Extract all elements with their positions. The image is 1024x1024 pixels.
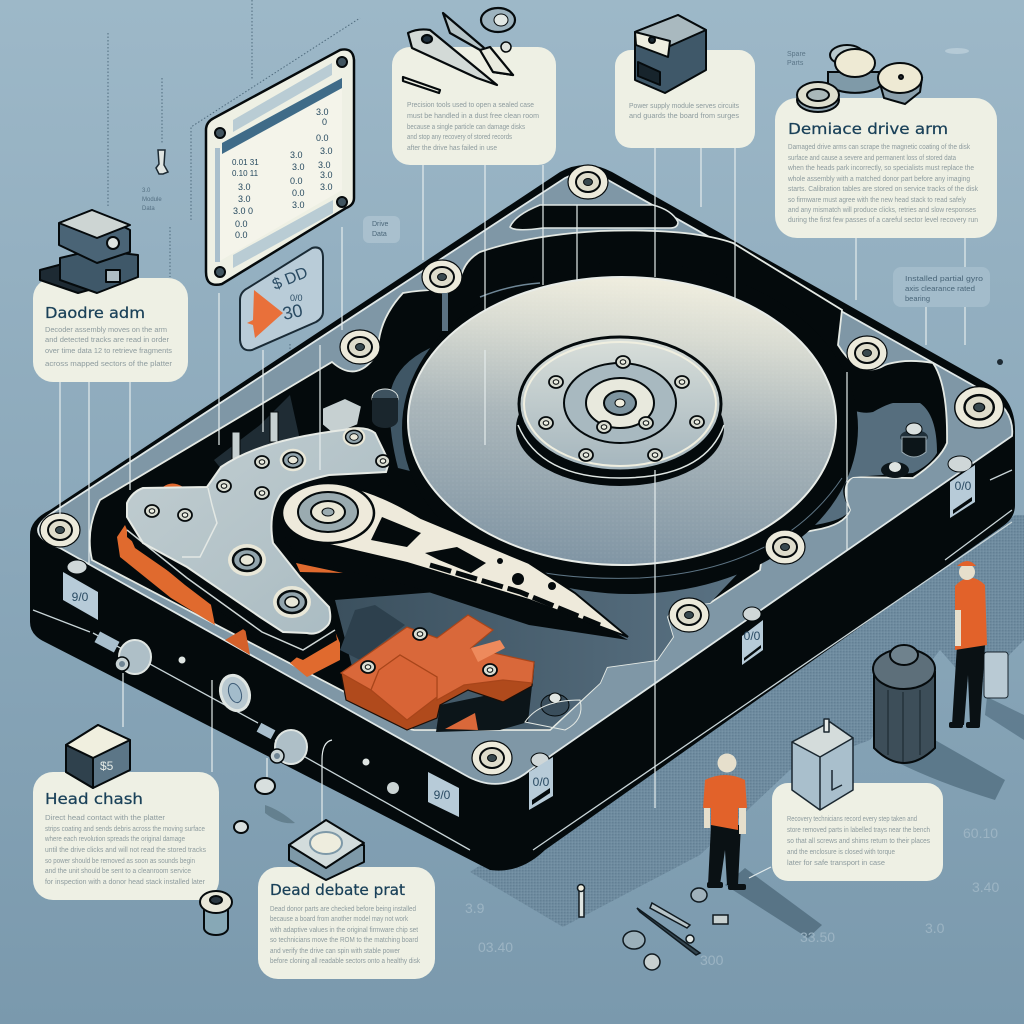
body: head crash: until the drive clicks and will not read the stored tracks [45,847,206,854]
heading: dead part: Dead debate prat [270,881,405,899]
body: top right: so firmware must agree with the new head stack to read safely [788,197,966,204]
icon: bushing [200,891,232,935]
chip: right note: bearing [905,294,930,303]
heading: top right: Demiace drive arm [788,120,948,138]
panel: monitor table: 3.0 [320,170,333,180]
body: dead part: because a board from another model may not work [270,916,408,923]
body: left panel: Decoder assembly moves on the arm [45,327,167,334]
faint numbers: 03.40 [478,939,513,955]
orange controller block [340,605,534,732]
body: head crash: for inspection with a donor head stack installed later [45,879,206,886]
chip: right note: axis clearance rated [905,284,975,293]
actuator posts [163,389,398,487]
panel: monitor table: 3.0 [320,146,333,156]
wall tiles: 0/0 [744,629,761,643]
chip: orange play marker: 0/0 [290,293,303,303]
read-write head arm [282,483,628,640]
body: dead part: and verify the drive can spin with stable power [270,948,401,955]
faint numbers: 33.50 [800,929,835,945]
left platter floor [390,345,437,472]
body: top right: when the heads park incorrectly, so specialists must replace the [787,165,974,172]
body: dead part: Dead donor parts are checked before being installed [270,906,416,913]
panel: monitor table [206,49,354,285]
leader lines [60,148,965,867]
body: dead part: so technicians move the ROM to the matching board [270,937,418,944]
chip: small note: Drive [372,221,388,228]
panel: monitor table: 3.0 0 [233,206,253,216]
panel: left top [33,278,188,382]
chip: right note [893,267,990,307]
faint numbers: 60.10 [963,825,998,841]
body: top middle: and stop any recovery of stored records [407,134,512,141]
background dotted guide lines [108,0,360,362]
body: dead part: before cloning all readable sectors onto a healthy disk [270,958,420,965]
disk platter [408,277,836,565]
body: top box: Power supply module serves circuits [629,103,739,110]
pocket posts [442,283,928,478]
orange coil under arm [117,525,343,677]
panel: lower right [772,783,943,881]
chip: orange play marker: 30 [281,300,304,324]
body: top right: surface and cause a severe and permanent loss of stored data [788,155,956,162]
body: lower right: Recovery technicians record every step taken and [787,816,917,823]
panel: monitor table: 0.0 [235,219,248,229]
panel: monitor table: 3.0 [238,194,251,204]
top slot [510,205,678,230]
panel: monitor table: 3.0 [320,182,333,192]
icon: stacked drive box [40,210,138,293]
drive body [30,165,1015,871]
body: lower right: later for safe transport in case [787,860,885,867]
top face rim [38,173,1012,784]
panel: monitor table: 0.0 [292,188,305,198]
body: lower right: store removed parts in labelled trays near the bench [787,827,930,834]
body: left panel: across mapped sectors of the platter [45,361,173,368]
body: lower right [787,816,930,867]
body: top middle [407,102,539,152]
icon: tools [403,8,515,93]
icon: power box [635,15,706,93]
body: top middle: after the drive has failed in use [407,145,497,152]
body: dead part [269,906,420,965]
floor shadow stipple [470,515,1024,927]
small note left: Data [142,206,155,212]
person: right technician [949,561,1024,740]
small note left: Module [142,197,162,203]
heading: head crash: Head chash [45,790,143,808]
wall tiles: 0/0 [533,775,550,789]
icon: cylinder canister [873,645,1005,800]
small note left: 3.0 [142,188,151,194]
connector line [749,867,771,878]
faint numbers: 3.9 [465,900,485,916]
wall tiles: 0/0 [955,479,972,493]
body: left panel: and detected tracks are read in order [45,337,170,344]
icon: cartridge box [792,719,853,810]
panel: monitor table: 0.01 31 [232,158,259,167]
right pocket floor [790,403,937,530]
small note left [142,188,162,212]
body: top middle: Precision tools used to open a sealed case [407,102,534,109]
icon: washer [234,778,295,833]
chip: orange play marker [240,247,323,350]
corner screws [40,165,1004,775]
spindle hub [516,337,724,486]
person: centre technician [703,754,822,938]
heading: left panel: Daodre adm [45,304,145,322]
panel: monitor table: 3.0 [292,162,305,172]
faint numbers: 3.0 [925,920,945,936]
panel: monitor table: 0.0 [290,176,303,186]
wall tiles [63,456,975,817]
faint labels right [787,48,1003,365]
actuator arm plate [127,427,390,660]
bottom floor [335,566,745,729]
cavity black [90,230,947,730]
icon: labelled block: $5 [100,759,114,773]
panel: dead debate part [258,867,435,979]
panel: monitor table: 3.0 [316,107,329,117]
body: head crash [44,815,206,886]
chip: right note: Installed partial gyro [905,274,983,283]
chip: orange play marker: $ DD [270,264,310,294]
panel: top box [615,50,755,148]
front wall connectors [94,632,399,794]
panel: monitor table: 3.0 [292,200,305,210]
body: top right [787,144,978,224]
body: top box: and guards the board from surges [629,113,740,120]
body: top right: during the first few passes of a careful sector level recovery run [788,217,978,224]
body: top right: starts. Calibration tables are stored on service tracks of the disk [788,186,978,193]
chip: small note [363,216,400,243]
panel: head crash [33,772,219,900]
body: left panel: over time data 12 to retrieve fragments [45,348,173,355]
icon: small pin [156,150,168,174]
panel: top right [775,98,997,238]
panel: monitor table: 3.0 [238,182,251,192]
body: dead part: with adaptive values in the original firmware chip set [269,927,418,934]
panel: monitor table: 0.0 [235,230,248,240]
body: top right: whole assembly with a matched donor part before any imaging [787,176,970,183]
panel: monitor table: 0 [322,117,327,127]
body: head crash: where each revolution spreads the original damage [44,836,185,843]
wall tiles: 9/0 [72,590,89,604]
front wall lines [33,470,1012,850]
icon: labelled block [66,725,130,788]
body: top right: Damaged drive arms can scrape the magnetic coating of the disk [788,144,970,151]
platter recess [402,262,858,594]
body: head crash: so power should be removed as soon as sounds begin [45,858,195,865]
faint labels right: Spare [787,51,806,58]
faint numbers [465,825,999,968]
icon: lens module [289,820,364,880]
bottom bracket post [525,693,581,730]
body: head crash: strips coating and sends debris across the moving surface [45,826,205,833]
body: top right: and any mismatch will produce clicks, retries and slow responses [788,207,976,214]
body: left panel [45,327,173,368]
body: lower right: so that all screws and shims return to their places [787,838,930,845]
panel: monitor table: 3.0 [290,150,303,160]
loose parts [578,884,728,970]
wall tiles: 9/0 [434,788,451,802]
panel: monitor table: 3.0 [318,160,331,170]
panel: top middle [392,47,556,165]
body: top box [629,103,740,120]
panel: monitor table: 0.10 11 [232,169,259,178]
chip: small note: Data [372,231,387,238]
icon: coins [797,45,922,112]
faint numbers: 3.40 [972,879,999,895]
body: top middle: because a single particle can damage disks [407,124,525,131]
body: top middle: must be handled in a dust free clean room [407,113,539,120]
body: lower right: and the enclosure is closed with torque [787,849,895,856]
body: head crash: and the unit should be sent to a cleanroom service [45,868,191,875]
panel: monitor table: 0.0 [316,133,329,143]
faint labels right: Parts [787,60,804,67]
hard drive [30,165,1015,871]
body: head crash: Direct head contact with the platter [45,815,166,822]
faint numbers: 300 [700,952,724,968]
